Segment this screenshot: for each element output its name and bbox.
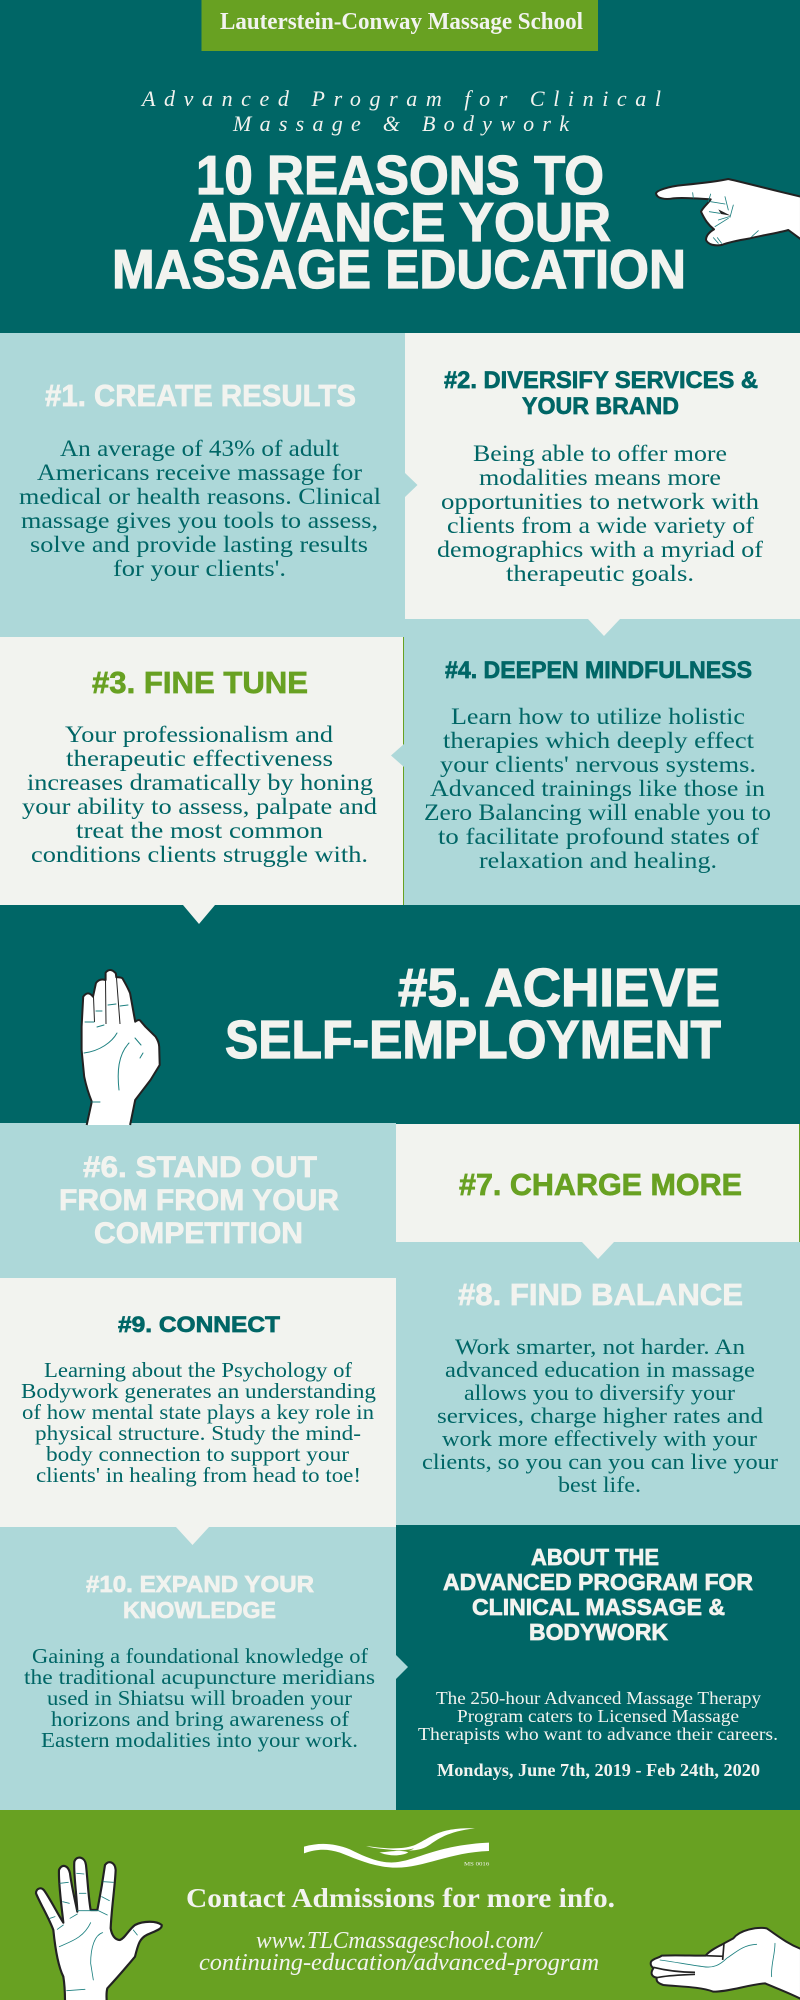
- title: [112, 145, 686, 300]
- body text: therapeutic goals.: [506, 561, 694, 586]
- description: The 250-hour Advanced Massage Therapy: [436, 1688, 761, 1708]
- body text: [424, 704, 771, 873]
- icon: pointing hand: [656, 179, 800, 245]
- body text: Eastern modalities into your work.: [41, 1728, 358, 1752]
- body text: work more effectively with your: [442, 1426, 758, 1451]
- panel: #4 deepen mindfulness: [391, 619, 800, 905]
- body text: Work smarter, not harder. An: [455, 1334, 745, 1359]
- panel: #6 stand out: [0, 1123, 396, 1278]
- heading: #6. STAND OUT: [83, 1151, 317, 1184]
- body text: medical or health reasons. Clinical: [19, 484, 381, 509]
- body text: to facilitate profound states of: [438, 824, 759, 849]
- heading: #7. CHARGE MORE: [459, 1167, 742, 1202]
- body text: massage gives you tools to assess,: [21, 508, 378, 533]
- panel: #5 achieve self-employment: [0, 905, 800, 1125]
- heading: ABOUT THE: [531, 1544, 659, 1570]
- description: Program caters to Licensed Massage: [457, 1706, 739, 1726]
- heading: CLINICAL MASSAGE &: [472, 1594, 725, 1620]
- body text: demographics with a myriad of: [437, 537, 763, 562]
- description: [418, 1688, 778, 1744]
- body text: increases dramatically by honing: [27, 770, 374, 795]
- body text: modalities means more: [479, 465, 721, 490]
- heading: [86, 1571, 314, 1623]
- body text: [19, 436, 381, 581]
- heading: BODYWORK: [529, 1619, 668, 1645]
- website: continuing-education/advanced-program: [199, 1950, 599, 1976]
- subtitle: [140, 86, 661, 136]
- school name badge: [202, 0, 598, 51]
- heading: [444, 367, 758, 420]
- body text: therapies which deeply effect: [443, 728, 755, 753]
- body text: clients from a wide variety of: [447, 513, 754, 538]
- website: www.TLCmassageschool.com/: [256, 1928, 543, 1954]
- panel: #7 charge more: [396, 1124, 800, 1259]
- body text: Bodywork generates an understanding: [21, 1379, 377, 1403]
- panel: footer contact: [0, 1810, 800, 2000]
- body text: An average of 43% of adult: [60, 436, 340, 461]
- body text: clients' in healing from head to toe!: [36, 1463, 361, 1487]
- icon: open hand left: [36, 1858, 162, 2000]
- heading: [443, 1544, 753, 1645]
- body text: [24, 1644, 375, 1752]
- body text: for your clients'.: [113, 556, 286, 581]
- heading: #1. CREATE RESULTS: [45, 378, 356, 413]
- panel: #8 find balance: [396, 1242, 800, 1526]
- dates: Mondays, June 7th, 2019 - Feb 24th, 2020: [437, 1760, 760, 1780]
- heading: #5. ACHIEVE: [398, 958, 720, 1018]
- body text: Americans receive massage for: [37, 460, 362, 485]
- panel: #3 fine tune: [0, 637, 404, 924]
- body text: of how mental state plays a key role in: [22, 1400, 375, 1424]
- panel: #1 create results: [0, 333, 418, 637]
- panel: #10 expand your knowledge: [0, 1527, 396, 1810]
- logo: waves: MS 0016: [464, 1863, 490, 1868]
- heading: [225, 958, 721, 1070]
- subtitle: Massage & Bodywork: [232, 111, 570, 136]
- panel: header: [0, 0, 800, 333]
- body text: therapeutic effectiveness: [66, 746, 333, 771]
- body text: [422, 1334, 779, 1497]
- body text: treat the most common: [76, 818, 324, 843]
- heading: FROM FROM YOUR: [59, 1184, 339, 1217]
- description: Therapists who want to advance their careers.: [418, 1724, 778, 1744]
- website: [199, 1928, 599, 1976]
- body text: solve and provide lasting results: [30, 532, 368, 557]
- heading: [59, 1151, 339, 1250]
- heading: SELF-EMPLOYMENT: [225, 1010, 721, 1070]
- body text: Learn how to utilize holistic: [451, 704, 745, 729]
- logo: waves: [304, 1828, 490, 1868]
- subtitle: Advanced Program for Clinical: [140, 86, 661, 111]
- school name badge: Lauterstein-Conway Massage School: [220, 9, 583, 35]
- body text: advanced education in massage: [445, 1357, 755, 1382]
- panel: #2 diversify services: [405, 333, 800, 636]
- body text: used in Shiatsu will broaden your: [47, 1686, 352, 1710]
- body text: Gaining a foundational knowledge of: [32, 1644, 368, 1668]
- body text: conditions clients struggle with.: [31, 842, 368, 867]
- body text: allows you to diversify your: [464, 1380, 736, 1405]
- body text: [22, 722, 378, 867]
- heading: #2. DIVERSIFY SERVICES &: [444, 367, 758, 394]
- body text: Advanced trainings like those in: [430, 776, 766, 801]
- icon: open hand right: [651, 1928, 800, 1999]
- heading: KNOWLEDGE: [123, 1597, 276, 1623]
- body text: Being able to offer more: [473, 441, 727, 466]
- body text: [21, 1358, 377, 1487]
- heading: #3. FINE TUNE: [92, 665, 308, 700]
- body text: your ability to assess, palpate and: [22, 794, 378, 819]
- heading: #8. FIND BALANCE: [458, 1277, 743, 1312]
- heading: #10. EXPAND YOUR: [86, 1571, 314, 1597]
- panel: about the program: [396, 1525, 800, 1810]
- body text: body connection to support your: [46, 1442, 349, 1466]
- heading: ADVANCED PROGRAM FOR: [443, 1569, 753, 1595]
- heading: COMPETITION: [94, 1217, 303, 1250]
- body text: the traditional acupuncture meridians: [24, 1665, 375, 1689]
- body text: horizons and bring awareness of: [51, 1707, 349, 1731]
- body text: best life.: [558, 1472, 641, 1497]
- body text: physical structure. Study the mind-: [35, 1421, 361, 1445]
- body text: Your professionalism and: [65, 722, 334, 747]
- body text: clients, so you can you can live your: [422, 1449, 779, 1474]
- body text: Zero Balancing will enable you to: [424, 800, 771, 825]
- heading: #9. CONNECT: [118, 1312, 281, 1337]
- panel: #9 connect: [0, 1278, 396, 1545]
- body text: [437, 441, 763, 586]
- icon: raised hand: [82, 970, 160, 1125]
- title: ADVANCE YOUR: [189, 192, 611, 253]
- title: 10 REASONS TO: [196, 145, 604, 206]
- contact heading: Contact Admissions for more info.: [186, 1883, 615, 1913]
- body text: your clients' nervous systems.: [440, 752, 756, 777]
- body text: relaxation and healing.: [479, 848, 717, 873]
- heading: YOUR BRAND: [522, 393, 679, 420]
- body text: Learning about the Psychology of: [44, 1358, 352, 1382]
- body text: services, charge higher rates and: [437, 1403, 763, 1428]
- body text: opportunities to network with: [441, 489, 760, 514]
- title: MASSAGE EDUCATION: [112, 239, 686, 300]
- heading: #4. DEEPEN MINDFULNESS: [445, 657, 752, 684]
